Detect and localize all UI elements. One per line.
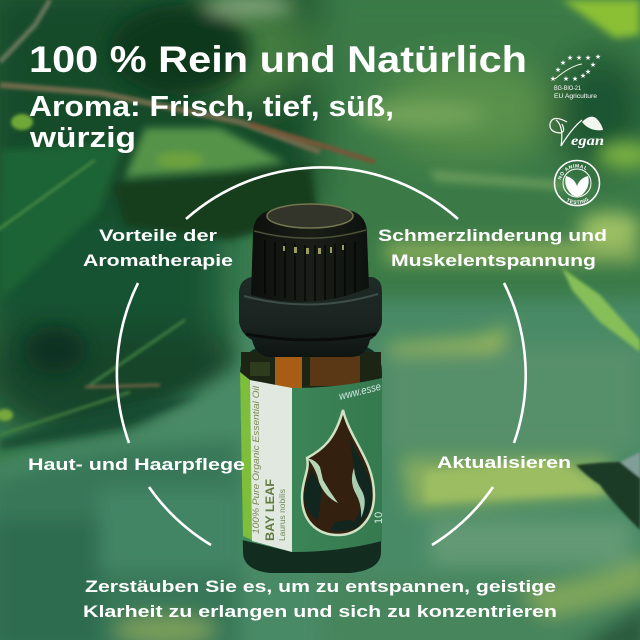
benefit: bottom caption: Klarheit zu erlangen und sich zu konzentrieren	[83, 602, 557, 621]
icon: EU organic stars: ★	[563, 75, 569, 83]
icon: no animal testing: TESTING	[567, 198, 588, 204]
benefit: Haut- und Haarpflege: Haut- und Haarpflege	[28, 455, 245, 474]
icon: no animal testing	[554, 160, 600, 206]
title: 100 % Rein und Natürlich	[29, 39, 527, 80]
amber liquid	[241, 352, 381, 388]
icon: no animal testing: NO ANIMAL	[558, 164, 586, 180]
icon: EU organic stars: ★	[576, 54, 582, 62]
benefit: bottom caption: Zerstäuben Sie es, um zu entspannen, geistige	[85, 577, 556, 596]
cap collar	[239, 277, 382, 357]
icon: EU organic stars: ★	[580, 72, 586, 80]
icon: EU organic stars: ★	[555, 66, 561, 74]
icon: EU organic stars: ★	[572, 75, 578, 83]
black ribbed cap	[251, 204, 369, 302]
subtitle	[29, 91, 394, 154]
icon: EU organic stars: ★	[590, 61, 596, 69]
icon: EU organic stars	[550, 53, 601, 100]
benefit: Vorteile der Aromatherapie: Vorteile der	[99, 226, 217, 245]
label drop icon	[302, 410, 374, 535]
label: BAY LEAF	[263, 479, 277, 541]
benefit: Schmerzlinderung und Muskelentspannung: Muskelentspannung	[391, 251, 596, 270]
benefit: bottom caption	[83, 577, 557, 621]
label	[240, 372, 385, 552]
benefit: Vorteile der Aromatherapie: Aromatherapie	[83, 251, 233, 270]
icon: EU organic stars: ★	[595, 53, 601, 61]
benefit: Schmerzlinderung und Muskelentspannung: Schmerzlinderung und	[378, 226, 607, 245]
icon: EU organic stars: ★	[567, 54, 573, 62]
icon: Vegan	[550, 117, 604, 149]
label: 10	[373, 512, 385, 524]
glass body	[240, 346, 382, 573]
icon: EU organic stars: ★	[550, 75, 556, 83]
circular arc ring	[117, 167, 526, 545]
table surface	[0, 300, 640, 640]
label: Laurus nobilis	[278, 489, 287, 541]
icon: EU organic stars: ★	[560, 59, 566, 67]
subtitle: Aroma: Frisch, tief, süß,	[29, 91, 394, 123]
label text: 100% Pure Organic Essential Oil	[251, 385, 261, 534]
icon: EU organic stars: ★	[585, 68, 591, 76]
benefit: Schmerzlinderung und Muskelentspannung	[378, 226, 607, 270]
label: www.esse	[338, 381, 382, 403]
icon: EU organic stars: EU Agriculture	[554, 93, 597, 100]
essential oil bottle	[239, 204, 385, 573]
benefit: Vorteile der Aromatherapie	[83, 226, 233, 270]
icon: EU organic stars: ★	[585, 54, 591, 62]
benefit: Aktualisieren: Aktualisieren	[437, 453, 571, 472]
subtitle: würzig	[29, 122, 136, 154]
icon: Vegan: egan	[571, 134, 604, 149]
icon: EU organic stars: BG-BIO-21	[554, 85, 581, 92]
